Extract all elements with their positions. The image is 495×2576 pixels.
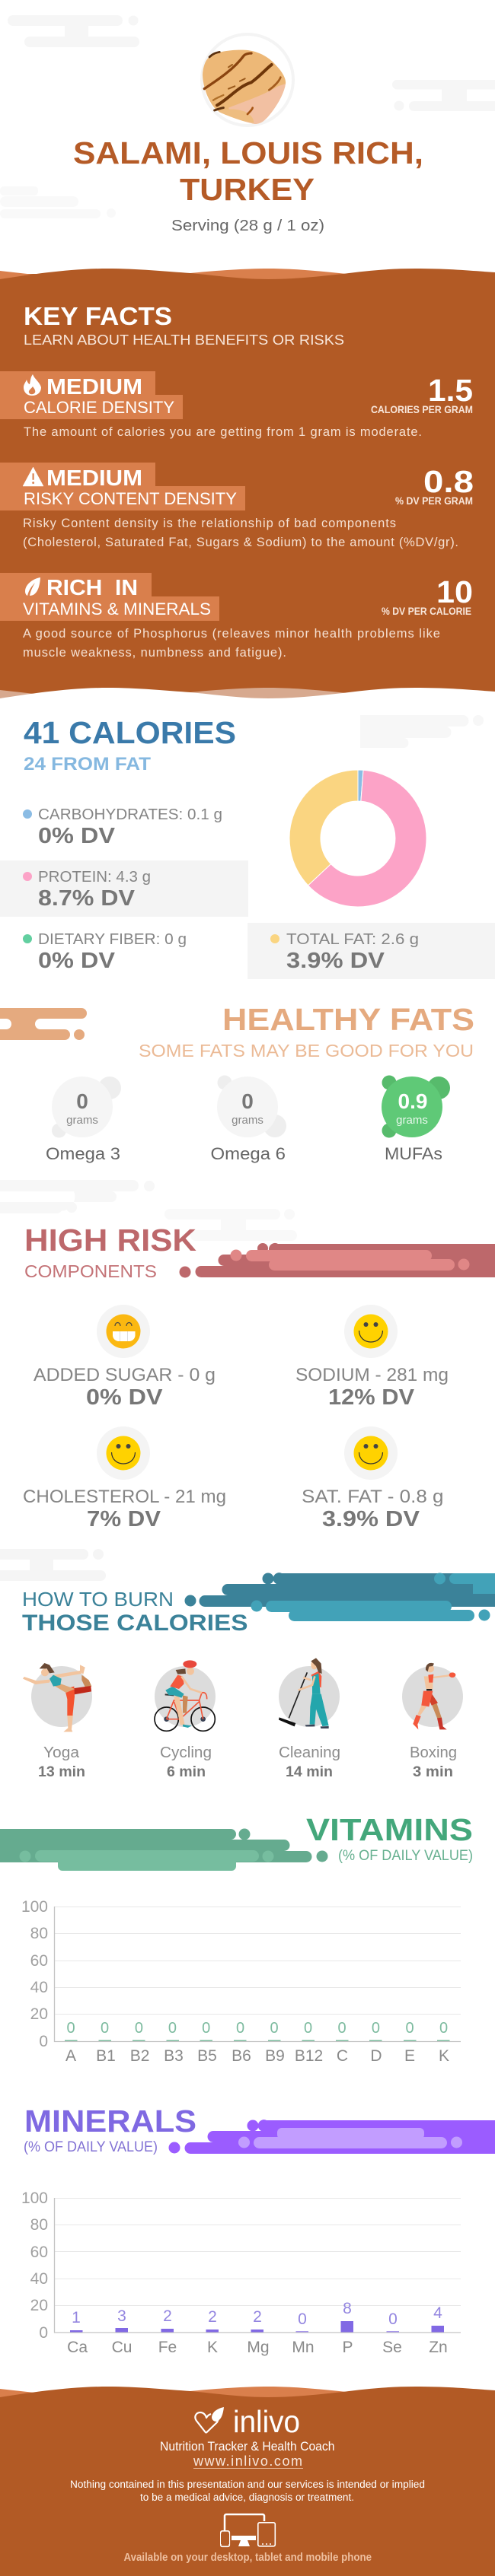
icon: warning triangle (23, 467, 43, 486)
panel: calories (0, 715, 495, 979)
bar chart: vitamins: 40 (30, 1979, 48, 1996)
panel: how to burn calories (22, 1573, 495, 1780)
decoration: high risk band (180, 1243, 495, 1278)
background cloud: calories (360, 715, 484, 748)
bar chart: vitamins: D (370, 2047, 382, 2065)
activity: cycling (155, 1660, 216, 1780)
decoration: green band (0, 1829, 327, 1871)
background cloud: below fats left (0, 1180, 155, 1213)
availability note: Available on your desktop, tablet and mobile phone (123, 2552, 372, 2564)
fact: calorie density: CALORIE DENSITY (24, 398, 174, 417)
bar chart: vitamins: 0 (405, 2020, 414, 2037)
activity: yoga: 13 min (38, 1764, 85, 1780)
bar chart: minerals: 20 (30, 2297, 48, 2314)
bar chart: vitamins: B5 (197, 2047, 217, 2065)
bar chart: vitamins: 0 (202, 2020, 210, 2037)
stat: mufas: grams (396, 1114, 428, 1127)
heading: those calories: THOSE CALORIES (22, 1611, 248, 1636)
row: total fat: TOTAL FAT: 2.6 g (286, 931, 419, 948)
heading: high risk: HIGH RISK (24, 1223, 196, 1258)
component: added sugar: ADDED SUGAR - 0 g (34, 1365, 216, 1385)
fact: calorie density: 1.5 (428, 373, 473, 408)
bar chart: minerals: Cu (112, 2339, 132, 2356)
row: dietary fiber: 0% DV (38, 949, 116, 973)
icon: flame (24, 374, 41, 396)
background cloud: top right (392, 80, 495, 111)
bar chart: minerals: 0 (388, 2310, 398, 2328)
bar chart: minerals: 40 (30, 2270, 48, 2288)
stat: omega 6: grams (232, 1114, 263, 1127)
component: sodium (295, 1305, 449, 1410)
activity: cleaning: Cleaning (279, 1744, 340, 1761)
panel: key facts (0, 269, 495, 704)
bar chart: minerals: 1 (72, 2309, 81, 2326)
icon: devices (221, 2514, 275, 2546)
subheading: key facts: LEARN ABOUT HEALTH BENEFITS OR RISKS (24, 332, 344, 348)
title (73, 135, 423, 207)
stat: omega 6: 0 (241, 1089, 254, 1113)
bar chart: vitamins: 0 (101, 2020, 109, 2037)
bar chart: minerals: 2 (163, 2307, 172, 2325)
bar chart: vitamins: B6 (232, 2047, 251, 2065)
bar chart: vitamins: 0 (270, 2020, 279, 2037)
bar chart: minerals: Se (382, 2339, 402, 2356)
row: carbohydrates: CARBOHYDRATES: 0.1 g (38, 806, 222, 823)
bar chart: vitamins: 0 (236, 2020, 244, 2037)
fact: risky content density: % DV PER GRAM (395, 495, 473, 507)
bar chart: vitamins: B2 (130, 2047, 149, 2065)
subheading: healthy fats: SOME FATS MAY BE GOOD FOR YOU (139, 1041, 474, 1061)
subheading: vitamins daily value: (% OF DAILY VALUE) (338, 1848, 473, 1864)
activity: yoga: Yoga (43, 1744, 80, 1761)
donut chart: macronutrients (289, 770, 426, 907)
bar chart: minerals: K (207, 2339, 218, 2356)
fact: risky content density: 0.8 (423, 464, 474, 499)
fact: risky content density: MEDIUM (46, 466, 142, 491)
fact: vitamins and minerals: 10 (436, 574, 473, 609)
subheading: calories from fat: 24 FROM FAT (24, 754, 151, 774)
row: carbohydrates: 0% DV (38, 824, 116, 848)
fact: risky content density: Risky Content density is the relationship of bad components (23, 517, 396, 530)
row: total fat: 3.9% DV (286, 949, 385, 973)
bar chart: vitamins: 100 (21, 1898, 48, 1916)
bar chart: vitamins: B3 (164, 2047, 184, 2065)
heading: vitamins: VITAMINS (306, 1812, 473, 1847)
bar chart: vitamins: 80 (30, 1925, 48, 1942)
row: protein: PROTEIN: 4.3 g (38, 869, 151, 886)
bar chart: minerals (21, 2190, 461, 2356)
fact: vitamins and minerals: % DV PER CALORIE (382, 605, 471, 617)
icon: smiling face (353, 1315, 388, 1348)
bar chart: vitamins: 0 (439, 2020, 448, 2037)
bar chart: minerals: Zn (429, 2339, 448, 2356)
bar chart: minerals: Mn (292, 2339, 315, 2356)
panel: high risk components (23, 1223, 495, 1531)
row: total fat (248, 923, 495, 979)
background cloud: top left (8, 15, 139, 47)
component: cholesterol (23, 1426, 226, 1531)
stat: mufas: MUFAs (385, 1144, 442, 1163)
bar chart: minerals: 60 (30, 2244, 48, 2261)
subheading: minerals daily value: (% OF DAILY VALUE) (24, 2139, 158, 2155)
bar chart: minerals: 0 (39, 2324, 48, 2342)
bar chart: minerals: 8 (343, 2300, 352, 2317)
bar chart: vitamins: B1 (96, 2047, 116, 2065)
serving size: Serving (28 g / 1 oz) (171, 217, 324, 234)
background cloud: above burn section (0, 1549, 106, 1581)
row: dietary fiber: DIETARY FIBER: 0 g (38, 931, 187, 948)
icon: smiling face (107, 1436, 140, 1470)
disclaimer: to be a medical advice, diagnosis or treatment. (140, 2492, 354, 2503)
fact: risky content density (0, 463, 474, 549)
disclaimer (70, 2479, 425, 2503)
component: added sugar (34, 1305, 216, 1410)
panel: minerals (21, 2104, 495, 2356)
icon: smiling face (353, 1436, 388, 1470)
bar chart: minerals: 2 (253, 2308, 262, 2326)
title: TURKEY (180, 172, 315, 207)
icon: leaf (25, 577, 40, 596)
bar chart: minerals: 3 (117, 2307, 126, 2325)
fact: risky content density: (Cholesterol, Saturated Fat, Sugars & Sodium) to the amount (%DV/gr). (23, 536, 458, 549)
stat: mufas: 0.9 (398, 1089, 427, 1113)
bar chart: minerals: Ca (67, 2339, 88, 2356)
component: saturated fat (302, 1426, 443, 1531)
bar chart: vitamins: B9 (265, 2047, 285, 2065)
bar chart: vitamins (21, 1898, 461, 2065)
bar chart: vitamins: A (65, 2047, 76, 2065)
logo: inlivo (195, 2404, 300, 2439)
fact: calorie density: CALORIES PER GRAM (371, 403, 473, 415)
bar chart: vitamins: K (439, 2047, 449, 2065)
food image (202, 34, 293, 126)
heading: how to burn: HOW TO BURN (22, 1588, 174, 1611)
bar chart: vitamins: 0 (372, 2020, 380, 2037)
component: added sugar: 0% DV (86, 1385, 163, 1410)
row: carbohydrates (23, 806, 222, 848)
icon: boxer figure (413, 1663, 455, 1729)
bar chart: minerals: 2 (208, 2308, 217, 2326)
component: saturated fat: SAT. FAT - 0.8 g (302, 1487, 443, 1507)
bar chart: minerals: 4 (433, 2304, 442, 2322)
fact: vitamins and minerals: VITAMINS & MINERALS (23, 599, 211, 619)
fact: vitamins and minerals: muscle weakness, numbness and fatigue). (23, 646, 286, 660)
heading: healthy fats: HEALTHY FATS (222, 1002, 474, 1037)
decoration: purple band (169, 2120, 495, 2154)
bar chart: vitamins: 0 (135, 2020, 143, 2037)
bar chart: minerals: 0 (298, 2310, 307, 2328)
fact: calorie density: MEDIUM (46, 375, 142, 399)
panel: footer (0, 2387, 495, 2576)
bar chart: minerals: P (342, 2339, 353, 2356)
activity: cleaning: 14 min (286, 1764, 333, 1780)
stat: omega 6 (210, 1076, 286, 1163)
background cloud: below fats centre (164, 1209, 297, 1241)
component: sodium: 12% DV (328, 1385, 415, 1410)
fact: vitamins and minerals (0, 573, 473, 660)
panel: vitamins (0, 1812, 473, 2065)
bar chart: vitamins: 0 (168, 2020, 177, 2037)
bar chart: vitamins: 0 (304, 2020, 312, 2037)
stat: omega 3: Omega 3 (46, 1144, 120, 1163)
bar chart: vitamins: C (337, 2047, 348, 2065)
bar chart: minerals: 100 (21, 2190, 48, 2207)
bar chart: vitamins: 0 (337, 2020, 346, 2037)
component: cholesterol: CHOLESTEROL - 21 mg (23, 1487, 226, 1507)
icon: cyclist figure (155, 1660, 215, 1731)
fact: calorie density: The amount of calories you are getting from 1 gram is moderate. (24, 425, 422, 439)
bar chart: vitamins: B12 (295, 2047, 323, 2065)
icon: cleaning figure (279, 1658, 329, 1728)
disclaimer: Nothing contained in this presentation and our services is intended or implied (70, 2479, 425, 2490)
fact: vitamins and minerals: A good source of Phosphorus (releaves minor health problems like (23, 627, 440, 641)
activity: boxing: 3 min (413, 1764, 453, 1780)
decoration: healthy fats band (0, 1008, 87, 1040)
activity: boxing (402, 1663, 463, 1780)
website link: www.inlivo.com (193, 2454, 302, 2469)
activity: cycling: 6 min (167, 1764, 206, 1780)
bar chart: minerals: Fe (158, 2339, 177, 2356)
bar chart: vitamins: E (404, 2047, 415, 2065)
stat: omega 6: Omega 6 (210, 1144, 286, 1163)
stat: omega 3 (46, 1077, 121, 1163)
heading: calories: 41 CALORIES (24, 715, 236, 750)
row: protein (0, 860, 248, 917)
component: saturated fat: 3.9% DV (322, 1507, 420, 1531)
fact: risky content density: RISKY CONTENT DENSITY (24, 489, 237, 508)
heading: minerals: MINERALS (24, 2104, 196, 2139)
component: cholesterol: 7% DV (87, 1507, 161, 1531)
row: protein: 8.7% DV (38, 886, 136, 911)
heading: key facts: KEY FACTS (24, 302, 172, 330)
stat: mufas (382, 1076, 450, 1163)
subheading: components: COMPONENTS (24, 1261, 157, 1281)
background cloud: left of title (0, 186, 116, 218)
stat: omega 3: 0 (76, 1089, 88, 1113)
bar chart: vitamins: 20 (30, 2005, 48, 2023)
bar chart: minerals: Mg (247, 2339, 270, 2356)
icon: yoga figure (23, 1663, 91, 1732)
fact: vitamins and minerals: RICH IN (46, 576, 138, 600)
icon: grinning face (107, 1315, 140, 1348)
bar chart: vitamins: 0 (66, 2020, 75, 2037)
fact: calorie density (0, 371, 473, 439)
bar chart: vitamins: 60 (30, 1952, 48, 1970)
activity: cleaning (279, 1658, 340, 1780)
title: SALAMI, LOUIS RICH, (73, 135, 423, 170)
decoration: teal band (184, 1573, 495, 1621)
activity: boxing: Boxing (410, 1744, 457, 1761)
stat: omega 3: grams (66, 1114, 98, 1127)
bar chart: vitamins: 0 (39, 2033, 48, 2050)
panel: healthy fats (0, 1002, 474, 1163)
logo: inlivo: inlivo (233, 2404, 300, 2439)
activity: cycling: Cycling (160, 1744, 212, 1761)
tagline: Nutrition Tracker & Health Coach (160, 2439, 335, 2454)
row: dietary fiber (23, 931, 187, 973)
activity: yoga (23, 1663, 92, 1780)
component: sodium: SODIUM - 281 mg (295, 1365, 449, 1385)
bar chart: minerals: 80 (30, 2216, 48, 2234)
